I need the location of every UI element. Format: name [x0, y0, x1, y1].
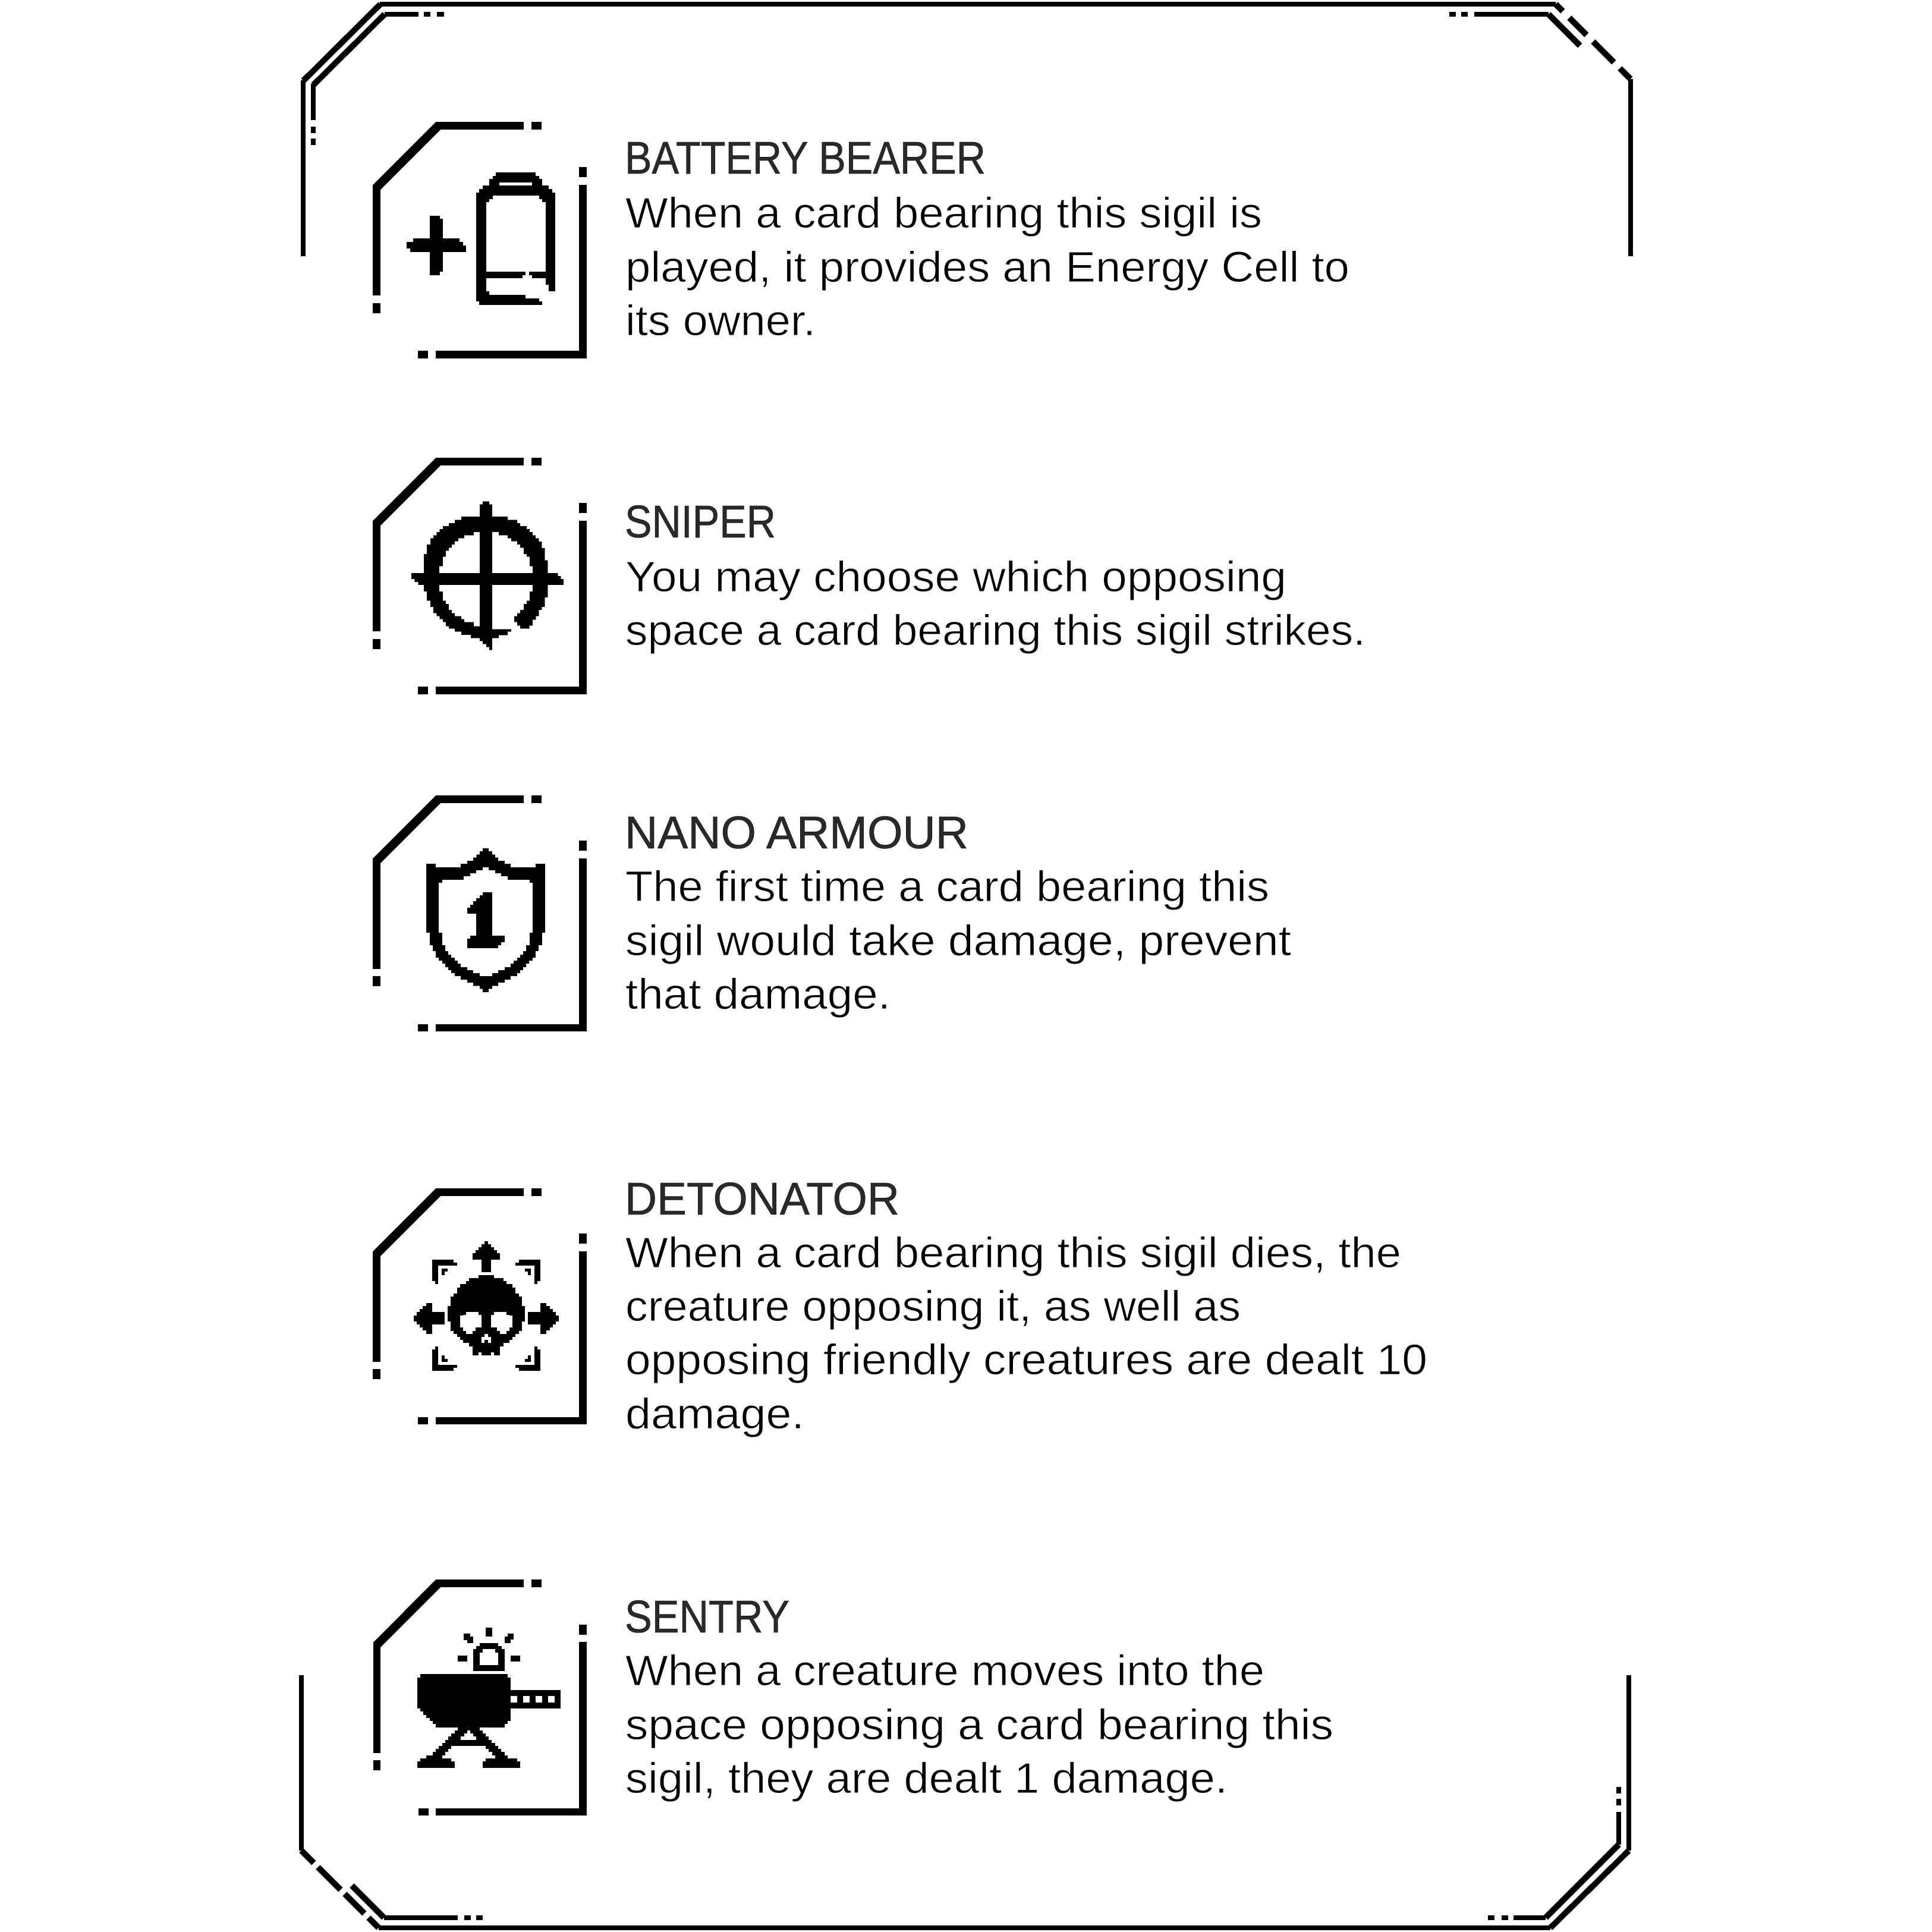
icon: battery with plus: [407, 172, 555, 305]
icon: sentry turret with alarm: [417, 1628, 561, 1768]
outer frame: [301, 4, 1631, 1928]
description: When a creature moves into the: [625, 1647, 1264, 1695]
heading: NANO ARMOUR: [625, 807, 968, 858]
icon frame: [373, 1579, 587, 1815]
sigil row: Detonator: [373, 1173, 1427, 1438]
sigil row: Sniper: [373, 458, 1365, 694]
sigil row: Sentry: [373, 1579, 1333, 1815]
icon: skull with arrows: [414, 1241, 559, 1371]
description: sigil would take damage, prevent: [625, 917, 1291, 965]
description: its owner.: [625, 297, 816, 345]
sigil row: Battery Bearer: [373, 122, 1349, 358]
description: opposing friendly creatures are dealt 10: [625, 1336, 1427, 1384]
description: that damage.: [625, 971, 891, 1018]
sigil row: Nano Armour: [373, 795, 1291, 1031]
description: You may choose which opposing: [625, 553, 1286, 601]
description: damage.: [625, 1390, 804, 1438]
icon frame: [373, 122, 587, 358]
description: [625, 553, 1365, 655]
description: sigil, they are dealt 1 damage.: [625, 1755, 1228, 1802]
icon: crosshair: [411, 501, 564, 650]
heading: BATTERY BEARER: [625, 133, 986, 184]
description: [625, 1229, 1427, 1438]
description: space a card bearing this sigil strikes.: [625, 607, 1365, 655]
icon frame: [373, 795, 587, 1031]
description: space opposing a card bearing this: [625, 1701, 1333, 1749]
description: creature opposing it, as well as: [625, 1283, 1241, 1330]
description: When a card bearing this sigil dies, the: [625, 1229, 1401, 1277]
icon frame: [373, 1188, 587, 1424]
icon: shield with number one: [426, 848, 545, 992]
description: [625, 1647, 1333, 1802]
description: The first time a card bearing this: [625, 863, 1269, 911]
heading: DETONATOR: [625, 1173, 899, 1225]
description: [625, 863, 1291, 1018]
icon frame: [373, 458, 587, 694]
heading: SENTRY: [625, 1591, 789, 1642]
description: When a card bearing this sigil is: [625, 190, 1262, 237]
heading: SNIPER: [625, 496, 776, 547]
description: [625, 190, 1349, 345]
description: played, it provides an Energy Cell to: [625, 244, 1349, 291]
